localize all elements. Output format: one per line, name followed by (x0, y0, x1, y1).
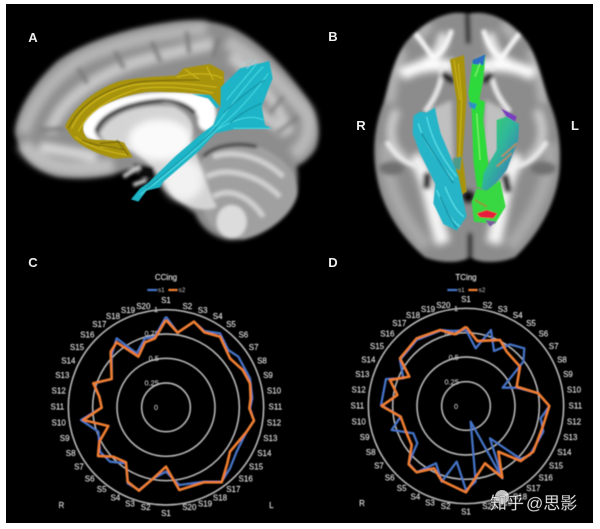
cerebellum (199, 144, 298, 239)
panel A: sagittal brain with CCing and TCing tracts (15, 20, 318, 240)
axis labels: S16 (539, 473, 553, 482)
rings (68, 310, 264, 505)
axis labels: S4 (513, 311, 523, 320)
ring values: 0.25 (145, 378, 159, 387)
legend: s1 (158, 287, 165, 294)
axis labels: S20 (182, 503, 197, 512)
axis labels: S5 (97, 485, 107, 494)
axis labels: S10 (352, 417, 366, 426)
axis labels: S10 (567, 385, 582, 394)
axis labels: S2 (441, 502, 451, 511)
axis labels: S5 (226, 320, 236, 329)
brain slice B (367, 7, 567, 267)
legend (447, 287, 486, 294)
tract: left cingulum green (468, 54, 488, 190)
ring values: 0.5 (149, 354, 159, 363)
axis labels: S20 (136, 302, 151, 311)
rings (368, 308, 564, 504)
axis labels: S18 (213, 493, 228, 502)
axis labels: S6 (85, 474, 95, 483)
ring values: 0.75 (145, 329, 159, 338)
axis labels: S5 (397, 484, 407, 493)
ring values: 0 (154, 403, 158, 412)
axis labels: S3 (198, 306, 208, 315)
axis labels: S1 (161, 509, 171, 518)
series s2 (382, 327, 549, 492)
axis labels: S3 (425, 498, 435, 507)
panel B: axial brain with tracts (367, 7, 567, 267)
axis labels: S12 (352, 385, 366, 394)
radar chart: TCing (351, 273, 583, 516)
tract: cingulum yellow (65, 64, 224, 159)
axis labels: S20 (436, 301, 451, 310)
axis labels: S12 (52, 386, 66, 395)
axis labels: S2 (482, 301, 493, 310)
axis labels (51, 296, 283, 518)
ring values: 0 (454, 402, 458, 411)
axis labels: S15 (249, 462, 264, 471)
label B: B (328, 29, 338, 44)
axis labels: S5 (526, 319, 536, 328)
axis labels: S14 (61, 356, 76, 365)
axis labels: S7 (74, 462, 84, 471)
axis labels: S13 (263, 434, 278, 443)
brain slice A (15, 20, 318, 240)
axis labels: R (58, 501, 64, 510)
axis labels: S8 (366, 448, 376, 457)
axis labels: S10 (267, 386, 282, 395)
axis labels: S17 (92, 320, 107, 329)
ring values: 1 (154, 305, 158, 314)
axis labels: S13 (55, 371, 70, 380)
axis labels: S7 (549, 342, 559, 351)
axis labels: S3 (125, 499, 135, 508)
axis labels: S13 (563, 433, 578, 442)
axis labels: S15 (370, 342, 385, 351)
axis labels: S7 (374, 461, 384, 470)
axis labels: S19 (498, 498, 513, 507)
axis labels: S12 (267, 418, 282, 427)
axis labels: S16 (80, 330, 95, 339)
axis labels: S11 (51, 402, 65, 411)
axis labels: S8 (66, 449, 76, 458)
axis labels: S12 (567, 417, 582, 426)
axis labels: S1 (461, 507, 471, 516)
corpus callosum (82, 92, 216, 141)
series s1 (381, 330, 549, 490)
axis labels: S9 (60, 434, 70, 443)
axis labels: S3 (498, 305, 508, 314)
axis labels (351, 295, 583, 516)
axis labels: S19 (198, 499, 213, 508)
axis labels: S17 (526, 484, 541, 493)
axis labels: R (359, 499, 365, 508)
label R: R (356, 118, 366, 133)
axis labels: S14 (557, 448, 572, 457)
axis labels: S6 (538, 329, 549, 338)
axis labels: L (269, 501, 274, 510)
axis labels: S4 (110, 493, 121, 502)
label C: C (28, 255, 38, 270)
ring values: 0.5 (449, 353, 459, 362)
brainstem and thalamus (100, 106, 217, 209)
axis labels: S8 (557, 355, 567, 364)
axis labels: S16 (239, 474, 253, 483)
axis labels: S20 (482, 502, 497, 511)
watermark (490, 490, 577, 513)
axis labels: S17 (226, 485, 241, 494)
ring values (145, 305, 159, 412)
chart title: TCing (455, 273, 477, 282)
axis labels: S2 (182, 302, 193, 311)
axis labels: S6 (238, 330, 249, 339)
axis labels: S18 (513, 492, 528, 501)
axis labels: S9 (360, 433, 370, 442)
ring values (445, 304, 459, 411)
axis labels: S11 (569, 401, 583, 410)
ring values: 0.25 (445, 377, 459, 386)
axis labels: S14 (361, 355, 376, 364)
axis labels: S1 (461, 295, 471, 304)
watermark: @思影 (526, 494, 577, 513)
axis labels: S11 (351, 401, 365, 410)
axis labels: S10 (52, 418, 66, 427)
tract: occipital green with red (472, 180, 506, 227)
series s2 (83, 320, 254, 491)
legend (147, 287, 186, 294)
ring values: 1 (454, 304, 458, 313)
axis labels: S18 (406, 311, 421, 320)
axis labels: S9 (563, 370, 573, 379)
chart title: CCing (155, 273, 177, 282)
ring values: 0.75 (445, 328, 459, 337)
axis labels: S13 (355, 370, 370, 379)
axis labels: S8 (257, 356, 267, 365)
axis labels: S19 (121, 306, 136, 315)
axis labels: S19 (421, 305, 436, 314)
axis labels: S2 (141, 503, 151, 512)
axis labels: L (569, 499, 574, 508)
legend: s1 (458, 287, 465, 294)
axis labels: S7 (249, 343, 259, 352)
label A: A (28, 30, 38, 45)
series s1 (81, 317, 254, 490)
radar chart: CCing (51, 273, 283, 518)
legend: s2 (179, 287, 186, 294)
axis labels: S6 (385, 473, 395, 482)
axis labels: S17 (392, 319, 407, 328)
axis labels: S4 (213, 312, 223, 321)
axis labels: S18 (106, 312, 121, 321)
axis labels: S9 (263, 371, 273, 380)
watermark: 知乎 (490, 494, 524, 513)
axis labels: S15 (70, 343, 85, 352)
tract: lateral green-blue (482, 108, 519, 191)
axis labels: S4 (410, 492, 421, 501)
tract: right cyan (413, 107, 467, 231)
label D: D (328, 255, 338, 270)
axis labels: S14 (257, 449, 272, 458)
axis labels: S15 (549, 461, 564, 470)
axis labels: S16 (380, 329, 395, 338)
label L: L (571, 118, 579, 133)
dark cisterns (133, 163, 157, 180)
axis labels: S11 (269, 402, 283, 411)
tract: yellow midline (450, 55, 467, 196)
legend: s2 (479, 287, 486, 294)
axis labels: S1 (161, 296, 171, 305)
tract: temporal cingulum cyan (131, 60, 273, 202)
